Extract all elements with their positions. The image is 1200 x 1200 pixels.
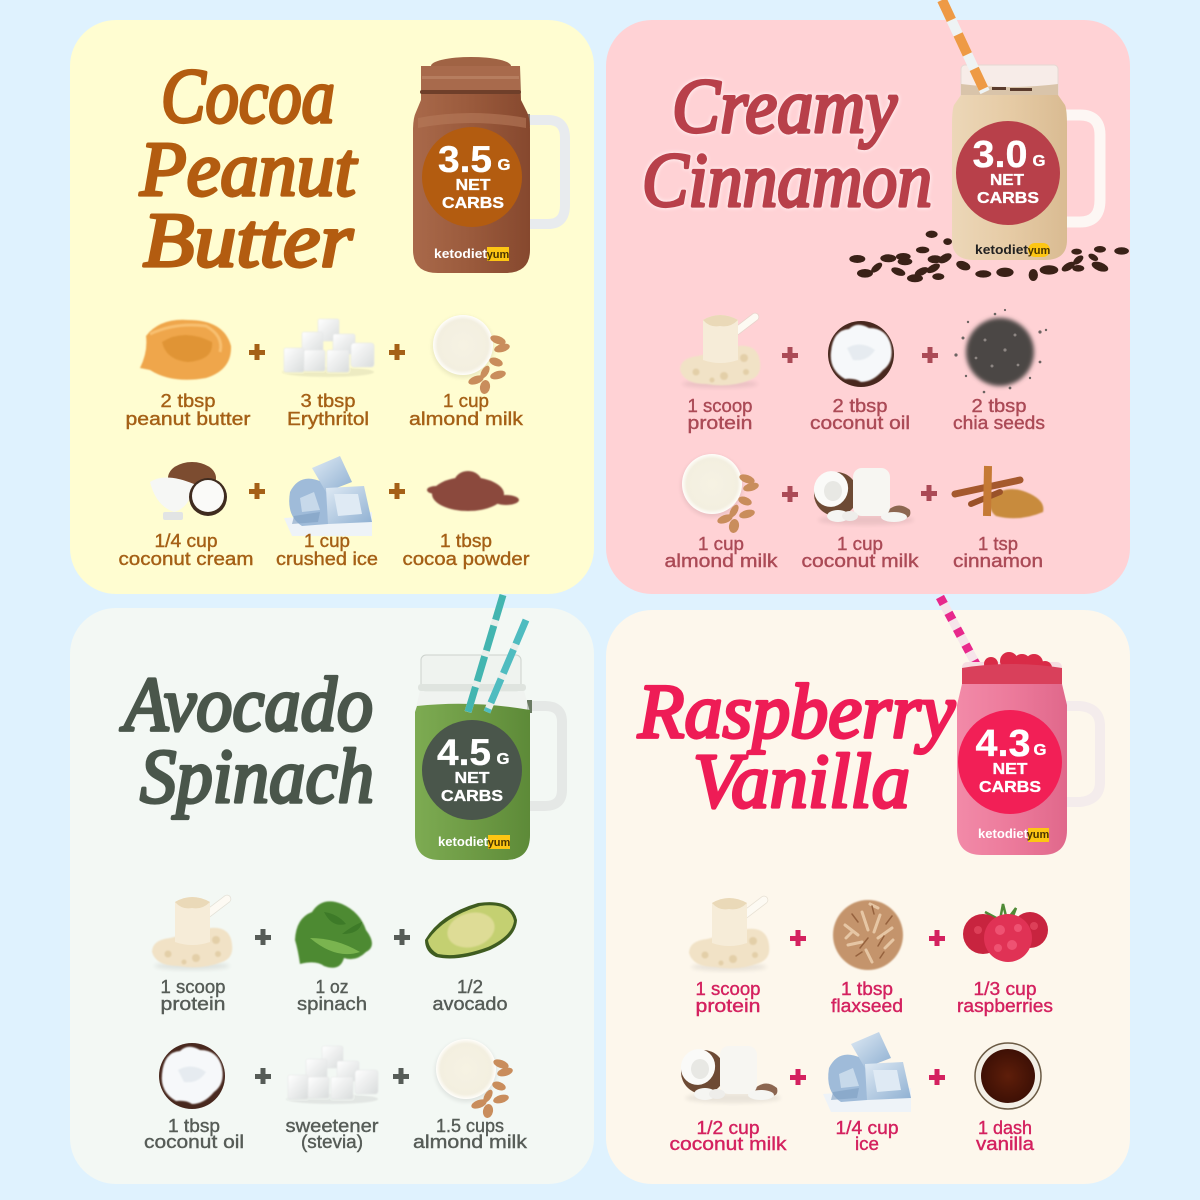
plus — [393, 1068, 409, 1084]
icon: coconut cream — [150, 462, 227, 520]
label: flaxseed: flaxseed — [831, 995, 903, 1016]
title: Creamy Cinnamon — [642, 63, 932, 223]
label: cocoa powder — [402, 530, 530, 569]
plus — [389, 483, 405, 499]
icon: vanilla — [975, 1043, 1041, 1109]
label: coconut milk — [670, 1117, 787, 1154]
badge: 4.3 g net carbs: CARBS — [979, 779, 1041, 796]
title: Cocoa Peanut Butter: Peanut — [139, 126, 358, 212]
logo: yum — [487, 249, 510, 261]
icon: cocoa powder — [427, 471, 519, 511]
label: protein: 1 scoop — [688, 395, 752, 416]
plus — [790, 930, 806, 946]
label: raspberries — [957, 978, 1053, 1016]
badge: 3.5 g net carbs: G — [498, 157, 510, 174]
label: crushed ice — [276, 530, 378, 569]
label: peanut butter — [126, 390, 250, 429]
label: cocoa powder: 1 tbsp — [440, 530, 492, 551]
plus — [921, 485, 937, 501]
label: almond milk: 1 cup — [443, 390, 489, 411]
title: Avocado Spinach: Avocado — [119, 661, 373, 747]
label: spinach: 1 oz — [316, 976, 348, 997]
plus — [255, 929, 271, 945]
logo — [978, 826, 1050, 842]
label: vanilla — [976, 1117, 1035, 1154]
title: Cocoa Peanut Butter: Butter — [143, 197, 354, 283]
label: almond milk: 1 cup — [698, 533, 744, 554]
badge: 3.5 g net carbs: 3.5 — [438, 139, 492, 180]
logo: ketodiet — [438, 834, 489, 849]
logo: ketodiet — [434, 246, 488, 261]
label: protein — [688, 395, 752, 433]
icon: almond milk — [435, 1039, 514, 1119]
badge: 4.3 g net carbs: G — [1034, 742, 1046, 759]
label: vanilla: vanilla — [976, 1133, 1035, 1154]
panel: Creamy Cinnamon — [606, 0, 1130, 594]
label: almond milk: almond milk — [409, 408, 524, 429]
label: cinnamon — [953, 533, 1043, 571]
label: sweetener: (stevia) — [301, 1131, 363, 1152]
label: coconut cream — [118, 530, 254, 569]
title: Raspberry Vanilla: Raspberry — [637, 668, 956, 754]
icon: coconut milk — [809, 466, 914, 525]
label: erythritol: 3 tbsp — [300, 390, 356, 411]
title: Avocado Spinach — [119, 661, 374, 819]
label: peanut butter: 2 tbsp — [160, 390, 216, 411]
badge: 4.5 g net carbs: G — [496, 751, 510, 768]
title: Avocado Spinach: Spinach — [140, 733, 374, 819]
logo: yum — [1028, 245, 1051, 257]
icon: crushed ice — [284, 456, 372, 536]
label: almond milk: almond milk — [664, 550, 778, 571]
label: almond milk — [664, 533, 778, 571]
badge: 4.3 g net carbs — [958, 710, 1062, 814]
icon: almond milk — [432, 315, 511, 395]
icon: protein scoop — [152, 897, 232, 970]
label: coconut cream: 1/4 cup — [154, 530, 218, 551]
label: protein: 1 scoop — [160, 976, 226, 997]
badge: 4.5 g net carbs — [422, 720, 522, 820]
icon: raspberries — [963, 904, 1048, 962]
panel: Cocoa Peanut Butter — [70, 20, 594, 594]
coffee beans — [849, 231, 1129, 282]
jar: creamy coffee smoothie with badge — [942, 0, 1100, 260]
logo: ketodiet — [978, 826, 1029, 841]
label: raspberries: raspberries — [957, 995, 1053, 1016]
title: Raspberry Vanilla: Vanilla — [693, 738, 910, 824]
title: Creamy Cinnamon: Creamy — [672, 63, 898, 149]
label: sweetener — [286, 1115, 378, 1152]
badge: 3.0 g net carbs: NET — [990, 172, 1024, 189]
label: almond milk: almond milk — [413, 1131, 528, 1152]
label: coconut oil: 2 tbsp — [832, 395, 888, 416]
label: spinach — [297, 976, 367, 1014]
icon: spinach — [295, 901, 372, 968]
panel: Avocado Spinach — [70, 595, 594, 1184]
label: peanut butter: peanut butter — [126, 408, 250, 429]
plus — [389, 344, 405, 360]
icon: cinnamon — [955, 466, 1043, 518]
icon: coconut milk — [676, 1044, 781, 1103]
label: chia seeds — [953, 395, 1045, 433]
icon: peanut butter — [140, 320, 231, 380]
label: coconut milk: 1/2 cup — [696, 1117, 760, 1138]
icon: flaxseed — [833, 900, 903, 970]
icon: ice — [823, 1032, 911, 1112]
badge: 3.0 g net carbs — [956, 121, 1060, 225]
label: almond milk: 1.5 cups — [436, 1115, 504, 1136]
title: Cocoa Peanut Butter — [139, 53, 358, 283]
badge: 3.5 g net carbs: NET — [456, 177, 491, 194]
label: protein: protein — [696, 995, 760, 1016]
ingredients — [144, 897, 528, 1152]
plus — [782, 486, 798, 502]
jar: green smoothie with badge — [415, 595, 562, 860]
label: coconut milk: coconut milk — [802, 550, 919, 571]
label: protein: 1 scoop — [696, 978, 760, 999]
icon: sugar cubes — [286, 1046, 378, 1104]
label: avocado: 1/2 — [457, 976, 483, 997]
plus — [929, 1069, 945, 1085]
ingredients — [670, 898, 1053, 1154]
logo — [434, 246, 510, 261]
label: chia seeds: 2 tbsp — [972, 395, 1026, 416]
logo: ketodiet — [975, 242, 1029, 257]
plus — [782, 347, 798, 363]
label: cinnamon: cinnamon — [953, 550, 1043, 571]
logo: yum — [488, 837, 511, 849]
icon: chia seeds — [954, 309, 1047, 393]
label: coconut oil — [810, 395, 910, 433]
badge: 3.0 g net carbs: CARBS — [977, 190, 1039, 207]
label: cinnamon: 1 tsp — [978, 533, 1018, 554]
badge: 4.5 g net carbs: NET — [454, 770, 490, 787]
title: Creamy Cinnamon: Cinnamon — [642, 137, 932, 223]
label: erythritol — [287, 390, 369, 429]
label: raspberries: 1/3 cup — [974, 978, 1036, 999]
label: chia seeds: chia seeds — [953, 412, 1045, 433]
label: crushed ice: crushed ice — [276, 548, 378, 569]
label: ice: ice — [855, 1133, 879, 1154]
jar: raspberry smoothie with badge — [940, 597, 1100, 855]
label: coconut cream: coconut cream — [118, 548, 254, 569]
title: Cocoa Peanut Butter: Cocoa — [161, 53, 335, 139]
icon: coconut oil bowl — [159, 1043, 225, 1109]
badge: 4.5 g net carbs: 4.5 — [437, 732, 491, 773]
logo — [975, 242, 1051, 257]
icon: protein scoop — [689, 898, 769, 971]
label: coconut milk: 1 cup — [837, 533, 883, 554]
icon: avocado — [425, 902, 517, 958]
badge: 3.5 g net carbs — [422, 127, 522, 227]
plus — [255, 1068, 271, 1084]
label: almond milk — [413, 1115, 528, 1152]
label: flaxseed: 1 tbsp — [841, 978, 893, 999]
label: erythritol: Erythritol — [287, 408, 369, 429]
label: coconut oil: coconut oil — [144, 1131, 244, 1152]
label: sweetener: sweetener — [286, 1115, 378, 1136]
badge: 4.3 g net carbs: 4.3 — [976, 723, 1030, 765]
label: ice: 1/4 cup — [836, 1117, 898, 1138]
ingredients — [118, 315, 530, 569]
label: almond milk — [409, 390, 524, 429]
plus — [790, 1069, 806, 1085]
plus — [922, 347, 938, 363]
icon: protein scoop — [680, 315, 760, 388]
label: spinach: spinach — [297, 993, 367, 1014]
label: vanilla: 1 dash — [978, 1117, 1032, 1138]
label: coconut milk: coconut milk — [670, 1133, 787, 1154]
ingredients — [664, 309, 1047, 571]
icon: sugar cubes — [282, 319, 374, 377]
label: coconut oil: coconut oil — [810, 412, 910, 433]
logo — [438, 834, 511, 849]
icon: almond milk — [681, 454, 760, 534]
label: flaxseed — [831, 978, 903, 1016]
label: protein — [160, 976, 226, 1014]
panel: Raspberry Vanilla — [606, 597, 1130, 1184]
icon: coconut oil bowl — [828, 321, 894, 387]
label: crushed ice: 1 cup — [304, 530, 350, 551]
plus — [929, 930, 945, 946]
logo: yum — [1027, 829, 1050, 841]
label: protein — [696, 978, 760, 1016]
badge: 3.5 g net carbs: CARBS — [442, 195, 504, 212]
label: coconut oil: 1 tbsp — [168, 1115, 220, 1136]
label: ice — [836, 1117, 898, 1154]
jar: chocolate smoothie with badge — [413, 57, 565, 273]
badge: 3.0 g net carbs: 3.0 — [972, 134, 1028, 176]
plus — [249, 483, 265, 499]
label: protein: protein — [688, 412, 752, 433]
badge: 3.0 g net carbs: G — [1032, 153, 1046, 170]
title: Raspberry Vanilla — [637, 668, 956, 824]
plus — [394, 929, 410, 945]
label: coconut milk — [802, 533, 919, 571]
label: coconut oil — [144, 1115, 244, 1152]
plus — [249, 344, 265, 360]
label: protein: protein — [160, 993, 226, 1014]
badge: 4.3 g net carbs: NET — [992, 761, 1028, 778]
label: avocado: avocado — [432, 993, 508, 1014]
label: avocado — [432, 976, 508, 1014]
label: cocoa powder: cocoa powder — [402, 548, 530, 569]
badge: 4.5 g net carbs: CARBS — [441, 788, 503, 805]
